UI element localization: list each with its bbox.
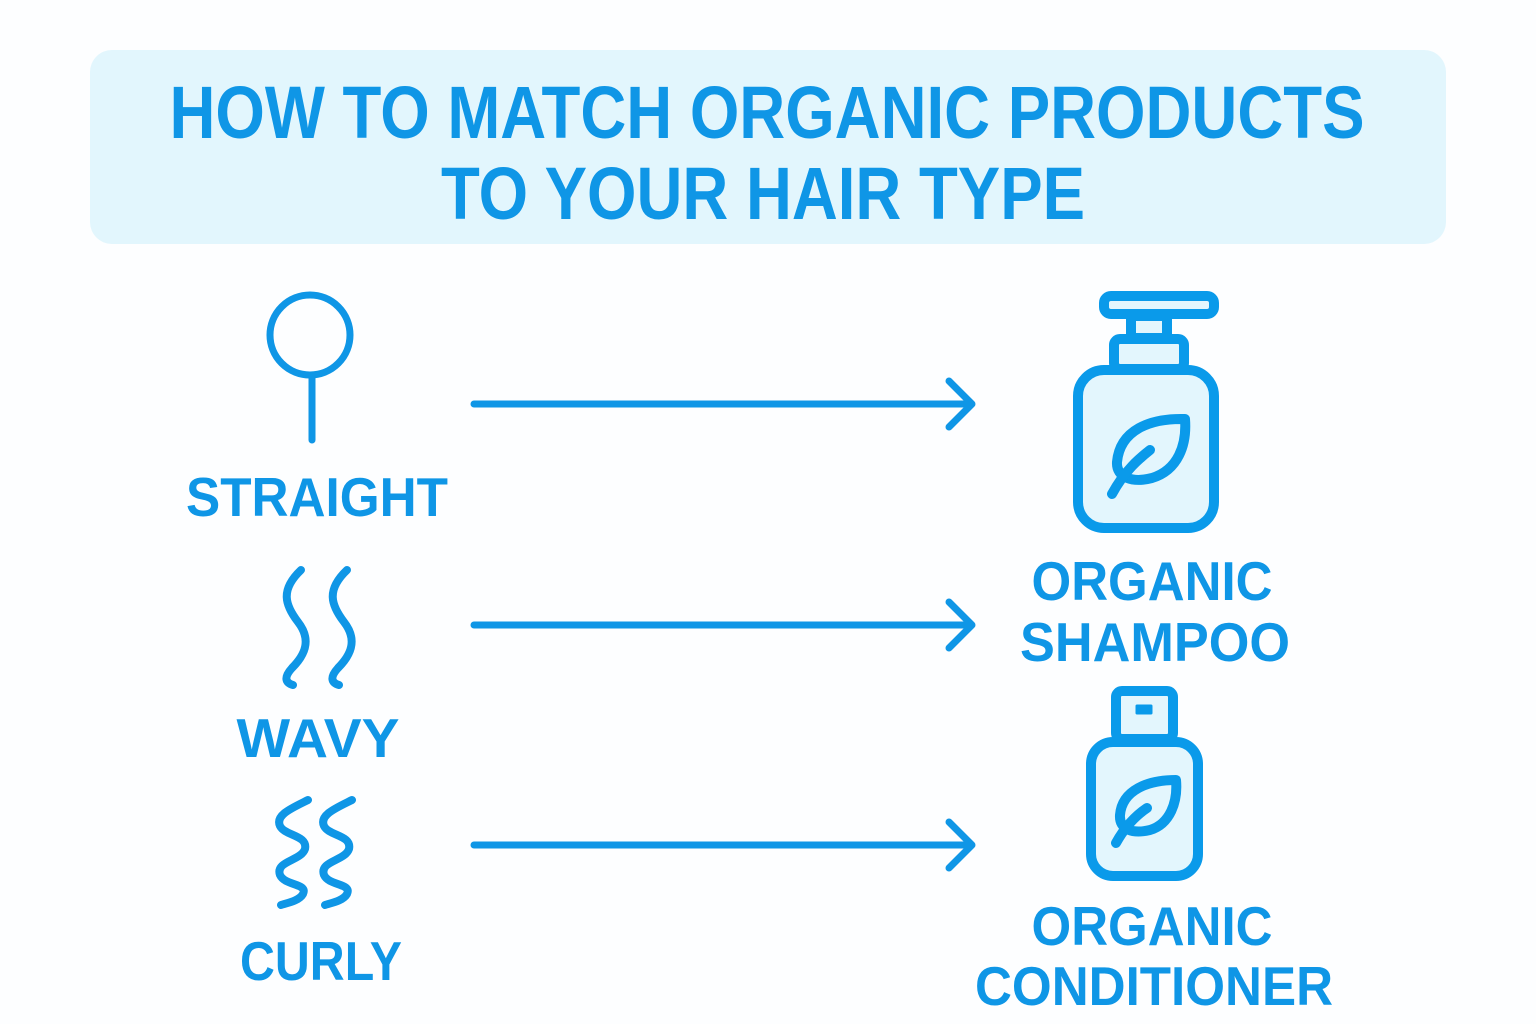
label: straight: STRAIGHT [186,466,448,528]
label: organic shampoo: SHAMPOO [1020,611,1290,673]
arrow: curly to conditioner [474,822,972,868]
label: organic conditioner: CONDITIONER [975,955,1333,1017]
arrow: straight to shampoo [474,381,972,427]
label: curly: CURLY [240,930,402,992]
title: HOW TO MATCH ORGANIC PRODUCTS [170,71,1364,154]
title [170,71,1364,235]
label: wavy: WAVY [236,707,400,769]
label: organic conditioner: ORGANIC [1032,895,1272,957]
title: TO YOUR HAIR TYPE [441,152,1085,235]
arrow: wavy to shampoo [474,602,972,648]
icon: straight hair [270,295,350,440]
icon: conditioner bottle [1091,691,1198,876]
icon: wavy hair [286,570,352,685]
icon: shampoo bottle [1078,296,1214,528]
label: organic shampoo: ORGANIC [1032,550,1272,612]
icon: curly hair [279,800,352,905]
title banner [90,50,1446,244]
label: organic conditioner [975,895,1333,1017]
label: organic shampoo [1020,550,1290,673]
